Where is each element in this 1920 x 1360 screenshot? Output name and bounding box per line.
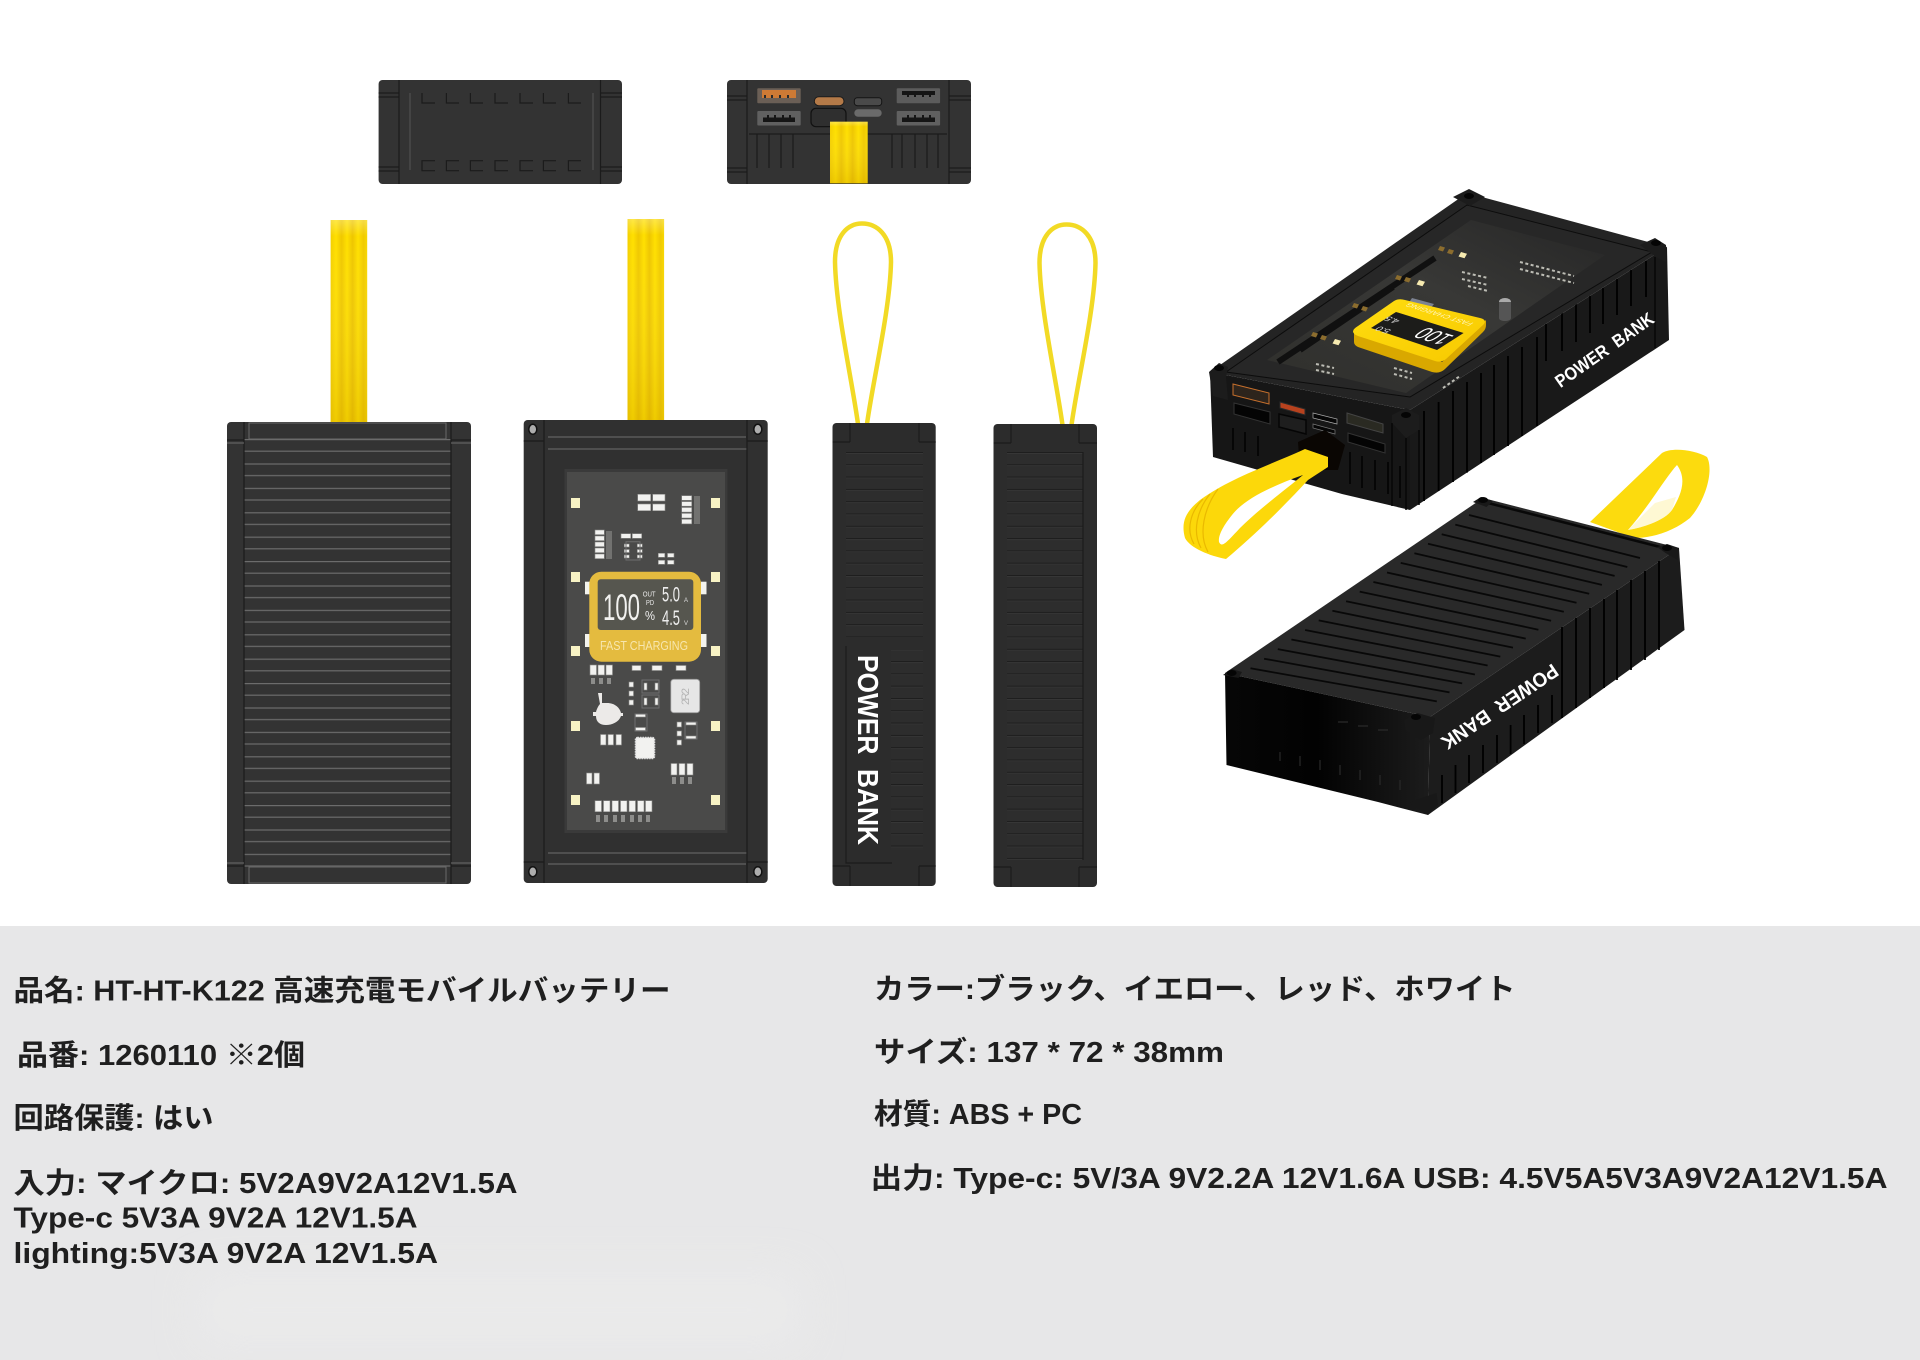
corner caps with screws	[1209, 189, 1666, 438]
front view of power bank with transparent window	[524, 420, 768, 883]
icon: upper right USB-A port	[1347, 413, 1383, 433]
circuit protection: 回路保護: はい	[14, 1102, 214, 1135]
input type-c: Type-c 5V3A 9V2A 12V1.5A	[14, 1202, 418, 1234]
isometric power bank: ribbed back	[1223, 497, 1684, 815]
LCD readout 100: 100	[1408, 324, 1460, 348]
LCD readout 100 percent: 100	[603, 587, 640, 628]
icon: capacitor	[593, 693, 623, 725]
right side face	[1428, 548, 1684, 815]
LCD unit V: V	[684, 621, 688, 627]
panel: clear window circuit board	[564, 469, 727, 833]
LED pads	[571, 498, 720, 805]
icon: USB-C port	[814, 97, 844, 106]
LED pads in window	[1311, 246, 1467, 345]
icon: QFN chip	[636, 738, 654, 758]
colors: カラー:ブラック、イエロー、レッド、ホワイト	[874, 972, 1516, 1006]
icon: inductor 2R2: 2R2	[680, 688, 692, 705]
yellow flat strap 2	[628, 219, 664, 420]
front face ribs	[1233, 428, 1400, 498]
input lightning: lighting:5V3A 9V2A 12V1.5A	[14, 1238, 438, 1270]
icon: power button	[1279, 414, 1306, 434]
LCD percent sign: %	[645, 608, 655, 623]
lower circuit components	[586, 665, 696, 812]
icon: lower right USB-A port	[1348, 433, 1385, 453]
icon: USB port upper right	[897, 88, 940, 103]
strap shadow on face	[1298, 430, 1345, 470]
open front face	[1225, 673, 1430, 815]
side ribs	[1424, 261, 1646, 501]
LCD label PD: PD	[646, 598, 654, 607]
FAST CHARGING label: FAST CHARGING	[600, 638, 688, 653]
capacitor in window	[1499, 298, 1511, 321]
back view of power bank with ribs	[227, 422, 471, 884]
icon: power button	[811, 108, 846, 127]
front face detail marks	[1280, 722, 1400, 790]
icon: lightning port	[1313, 424, 1335, 434]
icon: USB port lower right	[897, 111, 940, 126]
POWER BANK side label: POWER BANK	[1436, 659, 1562, 753]
icon: corner screws	[529, 424, 762, 877]
upper circuit components	[595, 494, 692, 564]
product number: 品番: 1260110 ※2個	[17, 1039, 305, 1072]
icon: lightning port	[854, 109, 882, 117]
top end view: plain end	[379, 80, 622, 184]
side view, plain	[994, 424, 1097, 887]
top end view: port end	[727, 80, 971, 184]
inductor in window	[1404, 298, 1434, 316]
product name: 品名: HT-HT-K122 高速充電モバイルバッテリー	[14, 974, 670, 1008]
panel: gray specification band	[0, 926, 1920, 1360]
input micro: 入力: マイクロ: 5V2A9V2A12V1.5A	[14, 1167, 518, 1200]
strap end	[830, 122, 868, 183]
POWER BANK label: POWER BANK	[851, 655, 883, 845]
LCD current value: 5.0	[662, 584, 680, 607]
LCD unit A: A	[684, 598, 688, 604]
front port face	[1210, 372, 1410, 510]
text block: right specifications	[870, 972, 1888, 1195]
yellow flat strap 1	[331, 220, 367, 422]
corner rail edges	[1392, 257, 1655, 510]
clear window	[1267, 220, 1605, 393]
side view with POWER BANK lettering	[832, 423, 936, 886]
LCD readout 5.0: 5.0	[1372, 324, 1395, 334]
yellow LCD block	[1353, 299, 1486, 373]
yellow strap loop on isometric power bank	[1183, 449, 1328, 559]
corner caps with screws	[1223, 497, 1679, 815]
side ribs	[1442, 561, 1659, 803]
callout: yellow LCD module	[585, 572, 706, 662]
top ribbed face	[1225, 498, 1679, 717]
material: 材質: ABS + PC	[874, 1098, 1082, 1131]
size: サイズ: 137 * 72 * 38mm	[874, 1035, 1224, 1069]
yellow side loop 1	[835, 224, 891, 424]
icon: orange USB port	[757, 88, 801, 103]
icon: USB-C port	[1280, 402, 1305, 415]
isometric power bank: transparent top	[1209, 189, 1669, 510]
LCD readout 4.5: 4.5	[1381, 314, 1404, 324]
component silk labels	[591, 496, 700, 822]
top face	[1210, 193, 1667, 410]
icon: lower left USB-A port	[1234, 403, 1270, 424]
output: 出力: Type-c: 5V/3A 9V2.2A 12V1.6A USB: 4.5V5A5V3A9V2A12V1.5A	[870, 1162, 1888, 1195]
icon: inductor 2R2	[671, 679, 700, 713]
top ribs	[1250, 515, 1640, 701]
LCD label OUT: OUT	[643, 590, 656, 599]
LCD voltage value: 4.5	[662, 607, 680, 630]
text block: left specifications	[14, 974, 670, 1270]
yellow strap loop behind second isometric power bank	[1590, 450, 1710, 538]
icon: USB port lower left	[757, 111, 801, 126]
dark internal rails	[1278, 258, 1435, 362]
white product background	[0, 0, 1920, 926]
POWER BANK side label: POWER BANK	[1551, 309, 1658, 392]
icon: micro USB port	[1313, 413, 1337, 424]
board components in window	[1316, 262, 1574, 388]
FAST CHARGING label: FAST CHARGING	[1403, 302, 1476, 327]
yellow side loop 2	[1040, 224, 1096, 425]
icon: micro USB port	[854, 98, 882, 106]
right side face	[1410, 247, 1669, 510]
icon: orange USB-A port	[1233, 384, 1269, 404]
